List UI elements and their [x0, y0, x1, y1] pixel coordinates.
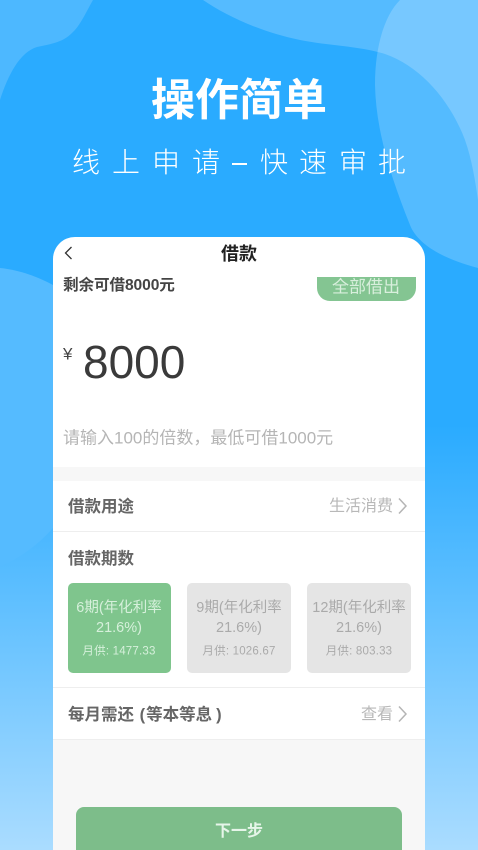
subtitle: 线 [72, 147, 100, 178]
loan purpose value: 生活消费 [329, 498, 393, 515]
gray divider band [53, 467, 425, 481]
subtitle: 快 [260, 147, 288, 178]
loan purpose label: 借款用途 [68, 498, 134, 516]
subtitle: 速 [299, 147, 327, 178]
button: next step [76, 807, 402, 850]
gray bottom area [53, 740, 425, 850]
icon: back chevron [64, 246, 72, 260]
option: 9 months: 9期(年化利率 [196, 600, 282, 616]
option: 6 months: 月供: 1477.33 [82, 645, 156, 657]
option: 9 months [187, 583, 291, 673]
option: 9 months: 月供: 1026.67 [202, 645, 276, 657]
monthly repayment label: 每月需还 (等本等息) [68, 706, 222, 724]
option: 6 months: 21.6%) [96, 620, 142, 636]
loan term label: 借款期数 [68, 550, 134, 568]
subtitle [72, 147, 406, 178]
option: 6 months [68, 583, 171, 673]
option: 12 months: 月供: 803.33 [326, 645, 392, 657]
icon: chevron [398, 706, 407, 722]
screen heading: 借款 [221, 244, 257, 264]
subtitle: 申 [152, 147, 180, 178]
option: 12 months: 12期(年化利率 [312, 600, 406, 616]
option: 9 months: 21.6%) [216, 620, 262, 636]
panel: phone screen [53, 237, 425, 850]
subtitle: 请 [192, 147, 220, 178]
subtitle: 审 [339, 147, 367, 178]
remaining credit: 剩余可借8000元 [63, 277, 175, 294]
icon: chevron [398, 498, 407, 514]
subtitle: 上 [112, 147, 140, 178]
option: 12 months: 21.6%) [336, 620, 382, 636]
currency symbol: ¥ [63, 344, 72, 364]
placeholder hint: 请输入100的倍数，最低可借1000元 [63, 428, 333, 448]
view link: 查看 [361, 706, 393, 723]
button: next step: 下一步 [215, 823, 263, 840]
button: borrow all: 全部借出 [332, 277, 400, 296]
button: borrow all [317, 277, 416, 301]
title: 操作简单 [151, 76, 327, 125]
option: 6 months: 6期(年化利率 [76, 600, 162, 616]
option: 12 months [307, 583, 411, 673]
subtitle: 批 [378, 147, 406, 178]
amount: 8000 [83, 336, 185, 388]
